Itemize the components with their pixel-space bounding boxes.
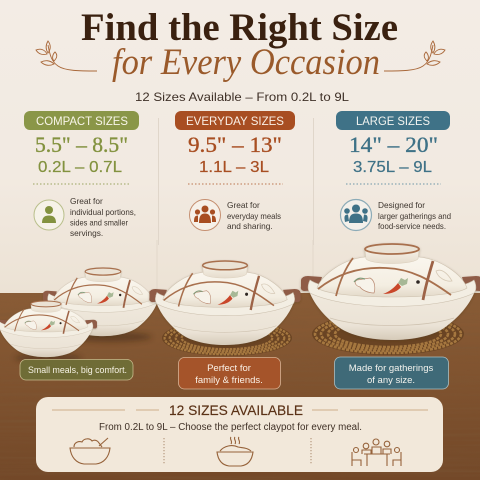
compact description: sides and smaller	[70, 218, 128, 228]
compact inch range: 5.5" – 8.5"	[35, 132, 128, 157]
icon: person	[34, 200, 64, 230]
everyday heading: EVERYDAY SIZES	[186, 116, 284, 128]
caption: compact: Small meals, big comfort.	[28, 365, 127, 376]
icon: salad bowl	[70, 438, 110, 464]
trivet: large	[312, 313, 464, 355]
caption: large: of any size.	[367, 375, 415, 386]
caption: everyday: family & friends.	[195, 375, 263, 386]
large description	[378, 200, 451, 231]
pot: small back	[43, 268, 163, 336]
compact description: servings.	[70, 228, 103, 238]
icon: people at table	[352, 439, 401, 466]
large litre range: 3.75L – 9L	[353, 159, 432, 176]
everyday description	[227, 200, 281, 231]
compact description: individual portions,	[70, 207, 136, 217]
panel heading: 12 SIZES AVAILABLE	[169, 403, 303, 418]
panel: compact sizes	[24, 111, 139, 238]
script subtitle: for Every Occasion	[112, 42, 380, 83]
compact description: Great for	[70, 196, 103, 206]
pot: medium	[149, 261, 301, 345]
panel subtext: From 0.2L to 9L – Choose the perfect claypot for every meal.	[99, 422, 362, 433]
background wall	[0, 0, 480, 294]
large description: larger gatherings and	[378, 211, 451, 221]
caption: everyday: Perfect for	[207, 363, 251, 374]
everyday description: Great for	[227, 200, 260, 210]
caption: large: Made for gatherings	[349, 363, 433, 374]
icon: left leaf ornament	[36, 41, 97, 71]
compact description	[70, 196, 136, 238]
everyday description: everyday meals	[227, 211, 281, 221]
wooden table	[0, 293, 480, 480]
panel: large sizes	[336, 111, 451, 231]
pot: small front	[0, 301, 97, 357]
panel: 12 sizes available	[36, 397, 443, 472]
title: Find the Right Size	[81, 6, 398, 49]
large description: food-service needs.	[378, 221, 446, 231]
compact heading: COMPACT SIZES	[36, 116, 128, 128]
pot shadows on table	[14, 332, 152, 362]
everyday description: and sharing.	[227, 221, 273, 231]
caption: large	[334, 357, 448, 389]
trivet: medium	[162, 320, 292, 356]
panel: everyday sizes	[175, 111, 295, 231]
icon: right leaf ornament	[384, 41, 445, 71]
icon: steaming bowl	[217, 437, 253, 466]
pot: large	[301, 244, 480, 340]
everyday inch range: 9.5" – 13"	[188, 132, 282, 157]
large inch range: 14" – 20"	[349, 132, 438, 157]
icon: family group	[190, 200, 220, 230]
large description: Designed for	[378, 200, 425, 210]
large heading: LARGE SIZES	[356, 116, 430, 128]
icon: crowd	[340, 200, 372, 230]
caption: compact	[20, 360, 133, 380]
compact litre range: 0.2L – 0.7L	[38, 159, 122, 176]
subheading: 12 Sizes Available – From 0.2L to 9L	[135, 90, 349, 104]
caption: everyday	[178, 358, 280, 389]
everyday litre range: 1.1L – 3L	[199, 159, 269, 176]
